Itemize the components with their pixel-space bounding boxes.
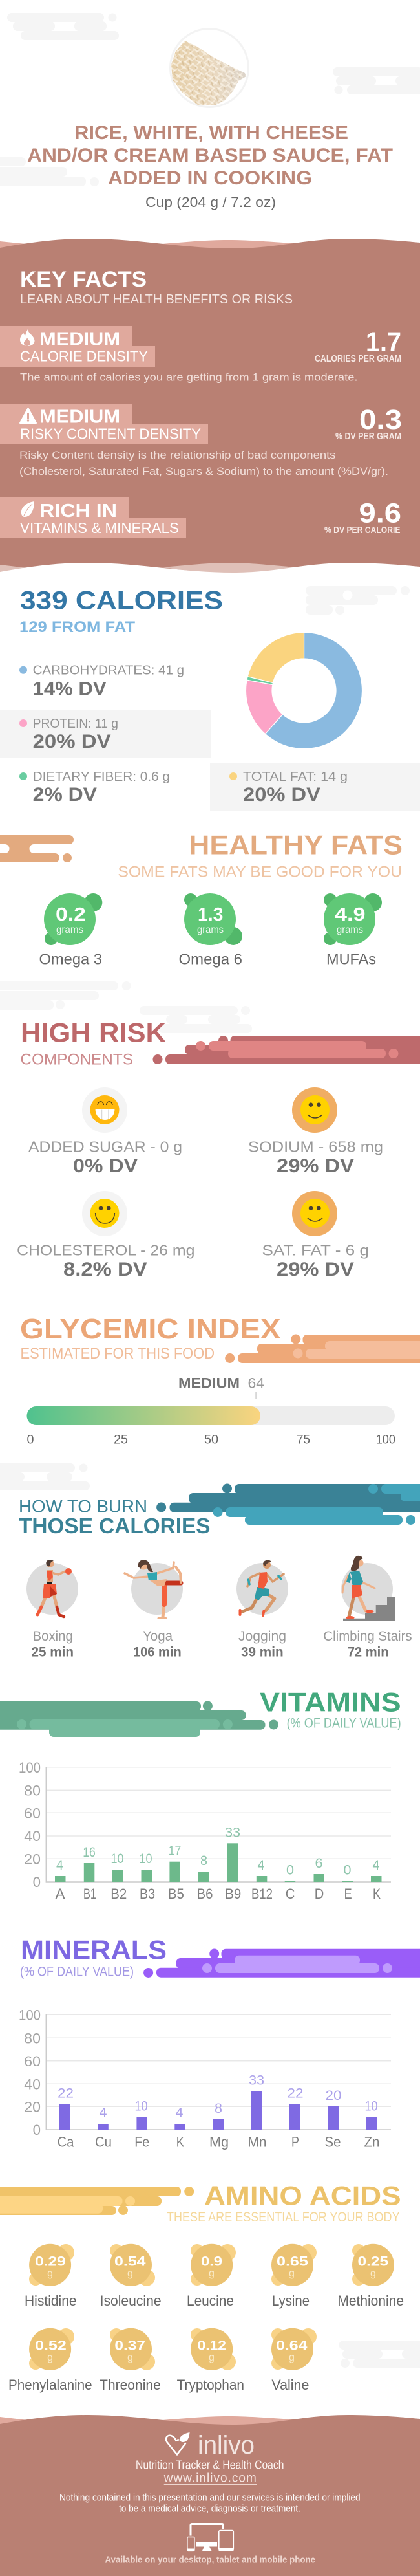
ribbon: glycemic index	[225, 1334, 420, 1363]
exercise: jogging	[236, 1560, 288, 1615]
mufas: 4.9	[335, 904, 366, 925]
ribbon: healthy fats	[0, 835, 74, 862]
vitamins heading: VITAMINS	[260, 1687, 401, 1718]
bar chart: vitamins: 100	[19, 1760, 41, 1776]
icon: devices	[187, 2524, 234, 2551]
amino: threonine: 0.37	[114, 2339, 145, 2353]
bar chart: vitamins: 60	[24, 1805, 41, 1822]
risky content density block: MEDIUM	[39, 406, 120, 427]
bar chart: vitamins: 10	[111, 1851, 124, 1866]
serving size: Cup (204 g / 7.2 oz)	[145, 194, 276, 210]
legend: total fat: TOTAL FAT: 14 g	[243, 770, 348, 784]
website: www.inlivo.com	[163, 2472, 257, 2485]
omega 6: Omega 6	[178, 951, 242, 968]
bar chart: vitamins: K	[373, 1886, 381, 1902]
exercise: boxing	[26, 1560, 78, 1617]
bar chart: minerals: 60	[24, 2053, 41, 2069]
background cloud: top right	[333, 67, 420, 94]
bar chart: vitamins: 0	[344, 1862, 352, 1877]
bar chart: minerals: 22	[287, 2086, 304, 2101]
risk item: added sugar: ADDED SUGAR - 0 g	[28, 1139, 182, 1155]
background cloud: left of title	[0, 157, 99, 186]
amino: histidine: Histidine	[25, 2293, 77, 2309]
amino: tryptophan: 0.12	[198, 2339, 226, 2353]
logo: inlivo heart	[166, 2432, 190, 2454]
bar chart: vitamins: 8	[200, 1853, 207, 1868]
glycemic index heading: GLYCEMIC INDEX	[20, 1313, 281, 1345]
amino: histidine	[25, 2244, 77, 2309]
ribbon: minerals	[143, 1948, 420, 1978]
ribbon: burn calories	[156, 1484, 420, 1525]
amino: methionine	[337, 2244, 404, 2309]
bar chart: minerals: 4	[100, 2106, 107, 2121]
bar chart: minerals: 80	[24, 2030, 41, 2047]
legend: carbohydrates: CARBOHYDRATES: 41 g	[33, 664, 184, 678]
bar chart: minerals: Cu	[95, 2134, 112, 2150]
bar chart: vitamins: A	[56, 1886, 65, 1902]
bar chart: minerals: 20	[24, 2099, 41, 2115]
bar chart: minerals: K	[176, 2134, 184, 2150]
amino: leucine: 0.9	[201, 2254, 222, 2269]
vitamins subheading: (% OF DAILY VALUE)	[287, 1716, 401, 1731]
vitamins and minerals block: RICH IN	[39, 501, 117, 521]
risk item: saturated fat: SAT. FAT - 6 g	[262, 1242, 369, 1259]
amino: histidine: 0.29	[35, 2254, 66, 2269]
availability note: Available on your desktop, tablet and mobile phone	[105, 2555, 315, 2566]
amino: isoleucine: 0.54	[114, 2254, 146, 2269]
legend: carbohydrates	[19, 664, 184, 700]
risk item: saturated fat: 29% DV	[277, 1259, 354, 1280]
bar chart: vitamins: C	[286, 1886, 295, 1902]
calorie density block	[0, 326, 401, 384]
bar chart: vitamins: 33	[225, 1826, 240, 1840]
amino: methionine: g	[370, 2268, 376, 2279]
exercise labels: 72 min	[348, 1645, 389, 1660]
legend: protein: PROTEIN: 11 g	[33, 717, 118, 731]
risky content density block: % DV PER GRAM	[335, 431, 401, 442]
legend: dietary fiber: 2% DV	[33, 784, 97, 805]
background cloud: high risk left	[0, 981, 131, 1010]
minerals subheading: (% OF DAILY VALUE)	[20, 1964, 134, 1979]
bar chart: vitamins: B9	[225, 1886, 241, 1902]
vitamins and minerals block: VITAMINS & MINERALS	[20, 519, 179, 536]
healthy fats subheading: SOME FATS MAY BE GOOD FOR YOU	[118, 864, 402, 881]
bar chart: minerals: 0	[33, 2122, 41, 2138]
risk item: sodium: 29% DV	[277, 1155, 354, 1177]
amino: phenylalanine: 0.52	[35, 2339, 67, 2353]
bar chart: vitamins: 4	[372, 1858, 380, 1873]
bar chart: vitamins: B5	[168, 1886, 184, 1902]
risky content density block: (Cholesterol, Saturated Fat, Sugars & Sodium) to the amount (%DV/gr).	[19, 465, 388, 477]
bar chart: vitamins: B1	[83, 1886, 96, 1902]
legend: protein: 20% DV	[33, 731, 111, 752]
bar chart: vitamins: B6	[196, 1886, 213, 1902]
bar chart: vitamins: B12	[251, 1886, 273, 1902]
icon: leaf	[21, 501, 34, 517]
amino: valine: 0.64	[276, 2339, 308, 2353]
bar chart: minerals	[19, 2007, 391, 2150]
amino: leucine: g	[209, 2268, 215, 2279]
amino: isoleucine: g	[127, 2268, 133, 2279]
key facts subheading: LEARN ABOUT HEALTH BENEFITS OR RISKS	[20, 292, 293, 307]
panel: footer	[0, 2415, 420, 2576]
background cloud: burn section	[0, 1463, 90, 1490]
amino: lysine: g	[289, 2268, 295, 2279]
background cloud: top left	[7, 13, 119, 40]
bar chart: vitamins: 0	[33, 1874, 41, 1890]
exercise labels: 106 min	[133, 1645, 182, 1660]
bar chart: minerals: 8	[215, 2101, 222, 2116]
exercise labels	[31, 1629, 412, 1660]
omega 3: Omega 3	[39, 951, 102, 968]
panel: key facts	[0, 239, 420, 577]
risky content density block: RISKY CONTENT DENSITY	[20, 426, 201, 442]
bar chart: vitamins: 4	[257, 1858, 265, 1873]
glycemic index gauge	[27, 1375, 395, 1447]
glycemic index gauge: 25	[114, 1434, 128, 1447]
mufas	[324, 893, 382, 968]
exercise: climbing stairs	[341, 1556, 395, 1621]
omega 3: 0.2	[56, 904, 86, 925]
burn heading: THOSE CALORIES	[19, 1514, 211, 1538]
amino: phenylalanine	[8, 2328, 92, 2393]
minerals heading: MINERALS	[21, 1934, 167, 1965]
bar chart: vitamins: 80	[24, 1783, 41, 1798]
calorie density block: CALORIE DENSITY	[20, 348, 148, 365]
calories from fat: 129 FROM FAT	[19, 618, 135, 636]
ribbon: high risk	[152, 1036, 420, 1064]
amino: histidine: g	[47, 2268, 53, 2279]
amino: tryptophan	[177, 2328, 244, 2393]
legend: dietary fiber	[19, 770, 170, 805]
bar chart: vitamins: 17	[169, 1844, 181, 1859]
exercise labels: Jogging	[238, 1629, 286, 1644]
exercise: yoga	[125, 1560, 183, 1619]
brand name: inlivo	[198, 2431, 255, 2460]
exercise labels: 25 min	[31, 1645, 74, 1660]
bar chart: vitamins: 40	[24, 1828, 41, 1844]
title: RICE, WHITE, WITH CHEESE	[74, 122, 348, 144]
amino: isoleucine	[100, 2244, 162, 2309]
amino: methionine: Methionine	[337, 2293, 404, 2309]
risk item: cholesterol	[17, 1191, 194, 1280]
burn heading: HOW TO BURN	[19, 1496, 147, 1516]
exercise labels: Boxing	[33, 1629, 73, 1644]
icon: warning triangle	[20, 408, 36, 423]
high risk heading: HIGH RISK	[21, 1018, 166, 1048]
risk item: added sugar: 0% DV	[73, 1155, 138, 1177]
bar chart: vitamins: 20	[24, 1851, 41, 1867]
background cloud: calories	[306, 586, 410, 615]
bar chart: minerals: Ca	[58, 2134, 74, 2150]
glycemic index gauge: 100	[376, 1434, 395, 1447]
food photo: rice in circle	[171, 28, 248, 107]
vitamins and minerals block	[0, 497, 401, 538]
disclaimer: to be a medical advice, diagnosis or treatment.	[119, 2504, 300, 2515]
calories heading: 339 CALORIES	[20, 587, 223, 615]
amino: tryptophan: g	[209, 2352, 215, 2363]
bar chart: minerals: Fe	[134, 2134, 149, 2150]
legend: carbohydrates: 14% DV	[33, 679, 107, 700]
mufas: MUFAs	[326, 951, 376, 968]
vitamins and minerals block: 9.6	[359, 498, 401, 529]
bar chart: vitamins: B2	[110, 1886, 127, 1902]
calorie density block: CALORIES PER GRAM	[315, 354, 401, 364]
bar chart: minerals: 22	[58, 2086, 74, 2101]
tagline: Nutrition Tracker & Health Coach	[136, 2459, 284, 2472]
background cloud: amino acids	[339, 2341, 420, 2368]
legend: dietary fiber: DIETARY FIBER: 0.6 g	[33, 770, 170, 784]
glycemic index gauge: 0	[27, 1434, 34, 1447]
risk item: cholesterol: CHOLESTEROL - 26 mg	[17, 1242, 194, 1259]
omega 6: 1.3	[198, 904, 223, 925]
amino: lysine: 0.65	[277, 2254, 308, 2269]
bar chart: minerals: 4	[176, 2106, 184, 2121]
omega 3	[39, 893, 102, 968]
bar chart: vitamins: 6	[315, 1856, 323, 1871]
bar chart: vitamins: B3	[140, 1886, 155, 1902]
amino: phenylalanine: g	[47, 2352, 53, 2363]
bar chart: minerals: 40	[24, 2077, 41, 2092]
bar chart: vitamins	[19, 1760, 391, 1902]
amino: methionine: 0.25	[358, 2254, 388, 2269]
icon: flame	[20, 329, 35, 346]
amino acids heading: AMINO ACIDS	[204, 2180, 401, 2210]
amino: valine: g	[289, 2352, 295, 2363]
risk item: saturated fat	[262, 1191, 369, 1280]
mufas: grams	[337, 924, 363, 935]
bar chart: vitamins: E	[344, 1886, 352, 1902]
bar chart: minerals: Mg	[209, 2134, 229, 2150]
glycemic index gauge: MEDIUM	[178, 1375, 240, 1392]
amino: leucine	[187, 2244, 236, 2309]
omega 6	[178, 893, 242, 968]
calorie density block: The amount of calories you are getting from 1 gram is moderate.	[20, 371, 358, 384]
legend background panels	[0, 710, 420, 811]
bar chart: minerals: Se	[324, 2134, 341, 2150]
donut chart: macronutrients	[246, 633, 362, 749]
risk item: sodium: SODIUM - 658 mg	[248, 1139, 383, 1155]
bar chart: minerals: P	[291, 2134, 299, 2150]
amino: threonine: g	[127, 2352, 133, 2363]
bar chart: minerals: 10	[364, 2099, 377, 2114]
legend: protein	[19, 717, 118, 752]
bar chart: minerals: 20	[326, 2088, 341, 2103]
disclaimer: Nothing contained in this presentation and our services is intended or implied	[59, 2493, 361, 2504]
title	[27, 122, 393, 189]
burn heading	[19, 1496, 211, 1538]
legend: total fat	[229, 770, 348, 805]
bar chart: minerals: Zn	[364, 2134, 380, 2150]
ribbon: vitamins	[0, 1701, 278, 1737]
amino: isoleucine: Isoleucine	[100, 2293, 162, 2309]
risk item: added sugar	[28, 1087, 182, 1177]
amino: lysine	[271, 2244, 317, 2309]
calorie density block: 1.7	[366, 327, 401, 358]
omega 3: grams	[56, 924, 83, 935]
title: AND/OR CREAM BASED SAUCE, FAT	[27, 145, 393, 166]
exercise labels: Climbing Stairs	[323, 1629, 412, 1644]
key facts heading: KEY FACTS	[20, 267, 147, 292]
amino: threonine	[100, 2328, 161, 2393]
calorie density block: MEDIUM	[39, 329, 120, 349]
bar chart: vitamins: 4	[56, 1858, 63, 1873]
glycemic index gauge: 64	[248, 1375, 264, 1392]
amino: lysine: Lysine	[272, 2293, 310, 2309]
amino: valine: Valine	[271, 2377, 309, 2393]
exercise labels: Yoga	[143, 1629, 173, 1644]
bar chart: vitamins: 16	[83, 1845, 96, 1860]
glycemic index gauge: 50	[204, 1434, 218, 1447]
amino: tryptophan: Tryptophan	[177, 2377, 244, 2393]
bar chart: vitamins: 0	[286, 1862, 294, 1877]
amino: valine	[271, 2328, 317, 2393]
legend: total fat: 20% DV	[243, 784, 320, 805]
icon: stairs	[343, 1597, 395, 1621]
exercise labels: 39 min	[241, 1645, 284, 1660]
risky content density block: Risky Content density is the relationship of bad components	[19, 449, 336, 461]
bar chart: minerals: 100	[19, 2007, 41, 2024]
amino: threonine: Threonine	[100, 2377, 161, 2393]
risky content density block: 0.3	[359, 404, 402, 435]
ribbon: amino acids	[0, 2187, 194, 2215]
bar chart: vitamins: 10	[140, 1851, 152, 1866]
glycemic index subheading: ESTIMATED FOR THIS FOOD	[21, 1345, 215, 1362]
background cloud: high risk centre	[140, 1006, 252, 1033]
amino: phenylalanine: Phenylalanine	[8, 2377, 92, 2393]
omega 6: grams	[197, 924, 224, 935]
bar chart: minerals: 10	[134, 2099, 147, 2114]
bar chart: minerals: 33	[249, 2073, 264, 2088]
disclaimer	[59, 2493, 361, 2515]
amino: leucine: Leucine	[187, 2293, 234, 2309]
title: ADDED IN COOKING	[108, 168, 312, 189]
glycemic index gauge: 75	[297, 1434, 310, 1447]
bar chart: minerals: Mn	[248, 2134, 266, 2150]
risk item: cholesterol: 8.2% DV	[63, 1259, 147, 1280]
risk item: sodium	[248, 1087, 383, 1177]
risky content density block	[0, 404, 402, 477]
healthy fats heading: HEALTHY FATS	[189, 830, 403, 860]
vitamins and minerals block: % DV PER CALORIE	[324, 525, 401, 536]
bar chart: vitamins: D	[315, 1886, 324, 1902]
high risk subheading: COMPONENTS	[21, 1051, 133, 1069]
